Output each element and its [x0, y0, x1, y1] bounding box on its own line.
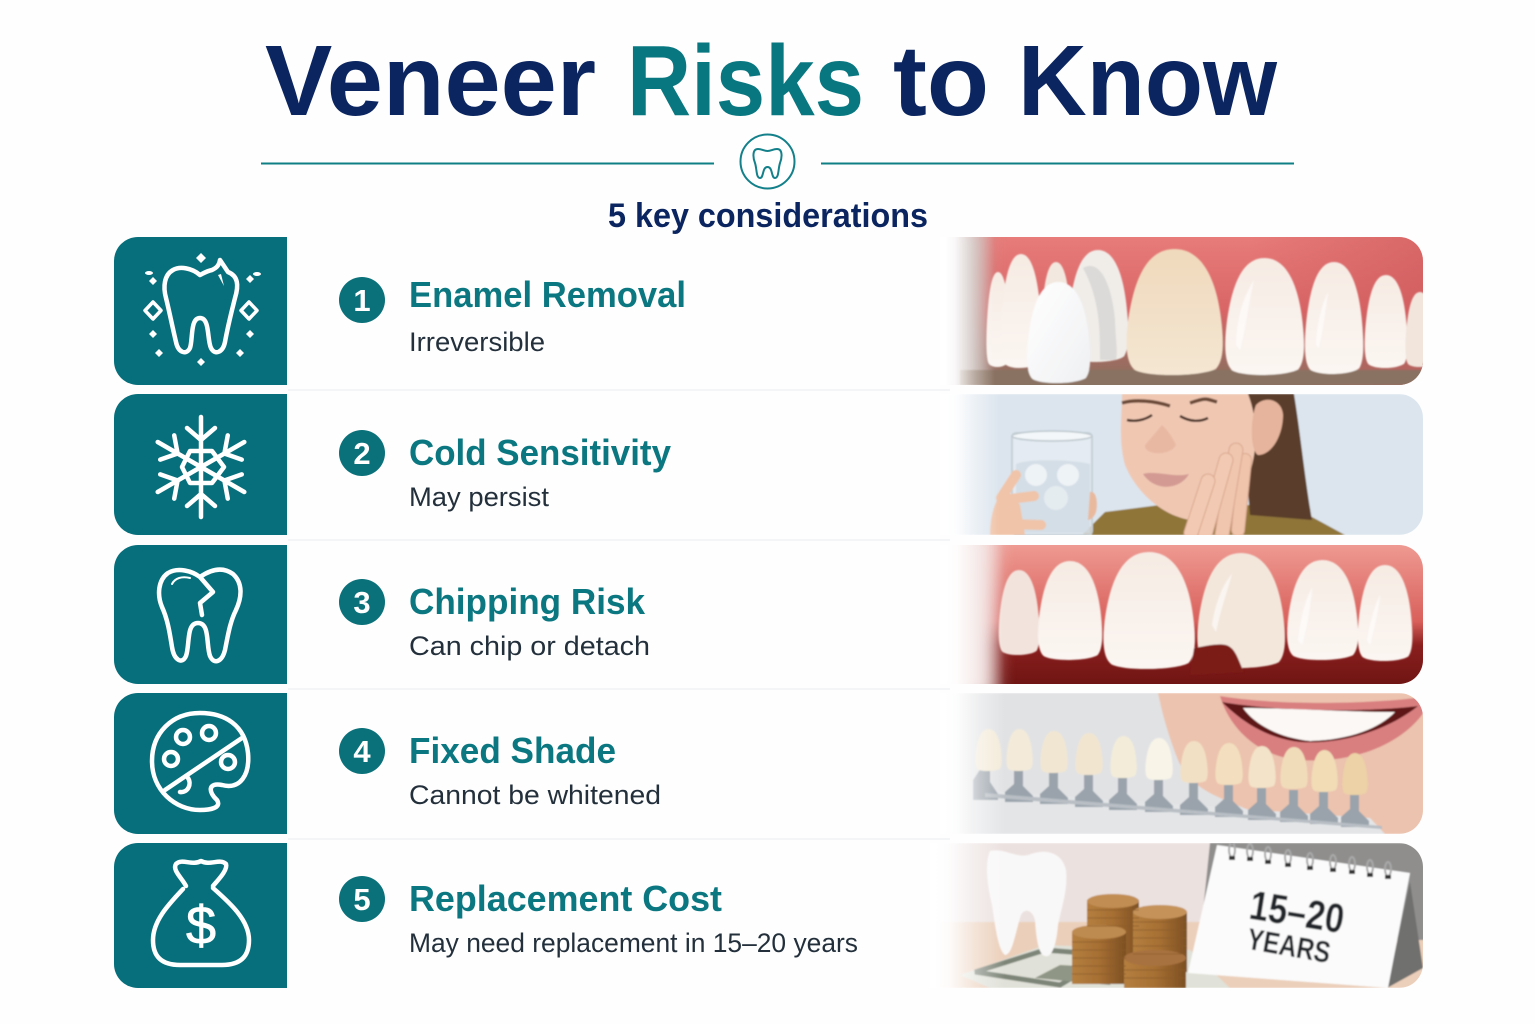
title: [265, 25, 1277, 137]
number badge 4: 4: [353, 734, 371, 769]
panel: cold sensitivity: [114, 394, 1424, 535]
icon: money bag: $: [186, 896, 216, 956]
photo: exposed veneers: [925, 225, 1435, 400]
icon: cracked tooth: [114, 545, 287, 684]
subtitle: 5 key considerations: [608, 197, 928, 235]
number badge 3: [339, 579, 385, 625]
panel: fixed shade: [114, 693, 1424, 834]
photo: chipped tooth: [925, 530, 1424, 700]
panel: chipping risk: [114, 530, 1424, 700]
number badge 2: 2: [353, 436, 371, 471]
icon: money bag: [114, 843, 287, 988]
photo: tooth, coins and calendar: [930, 843, 1424, 988]
panel: enamel removal: [114, 225, 1435, 400]
number badge 5: [339, 876, 385, 922]
description: Irreversible: [409, 327, 545, 357]
icon: snowflake: [114, 394, 287, 535]
number badge 2: [339, 430, 385, 476]
heading: Enamel Removal: [409, 274, 686, 315]
heading: Fixed Shade: [409, 730, 616, 771]
number badge 3: 3: [353, 585, 371, 620]
photo: tooth, coins and calendar: 15–20: [1246, 882, 1348, 942]
photo: tooth, coins and calendar: YEARS: [1245, 923, 1333, 970]
number badge 1: 1: [353, 283, 371, 318]
icon: palette: [114, 693, 287, 834]
number badge 1: [339, 277, 385, 323]
title: Veneer: [265, 25, 596, 137]
description: Can chip or detach: [409, 631, 650, 661]
description: May need replacement in 15–20 years: [409, 928, 858, 958]
title: Know: [1018, 25, 1277, 137]
title: Risks: [627, 25, 864, 137]
photo: shade guide: [940, 693, 1424, 834]
icon: tooth with sparkles: [114, 237, 287, 385]
heading: Replacement Cost: [409, 878, 722, 919]
number badge 4: [339, 728, 385, 774]
description: Cannot be whitened: [409, 780, 661, 810]
title: to: [893, 25, 989, 137]
photo: woman with ice water: [940, 394, 1424, 535]
heading: Chipping Risk: [409, 581, 646, 622]
panel: replacement cost: [114, 843, 1424, 988]
heading: Cold Sensitivity: [409, 432, 671, 473]
divider with tooth badge: [261, 134, 1294, 188]
description: May persist: [409, 482, 549, 512]
number badge 5: 5: [353, 882, 371, 917]
